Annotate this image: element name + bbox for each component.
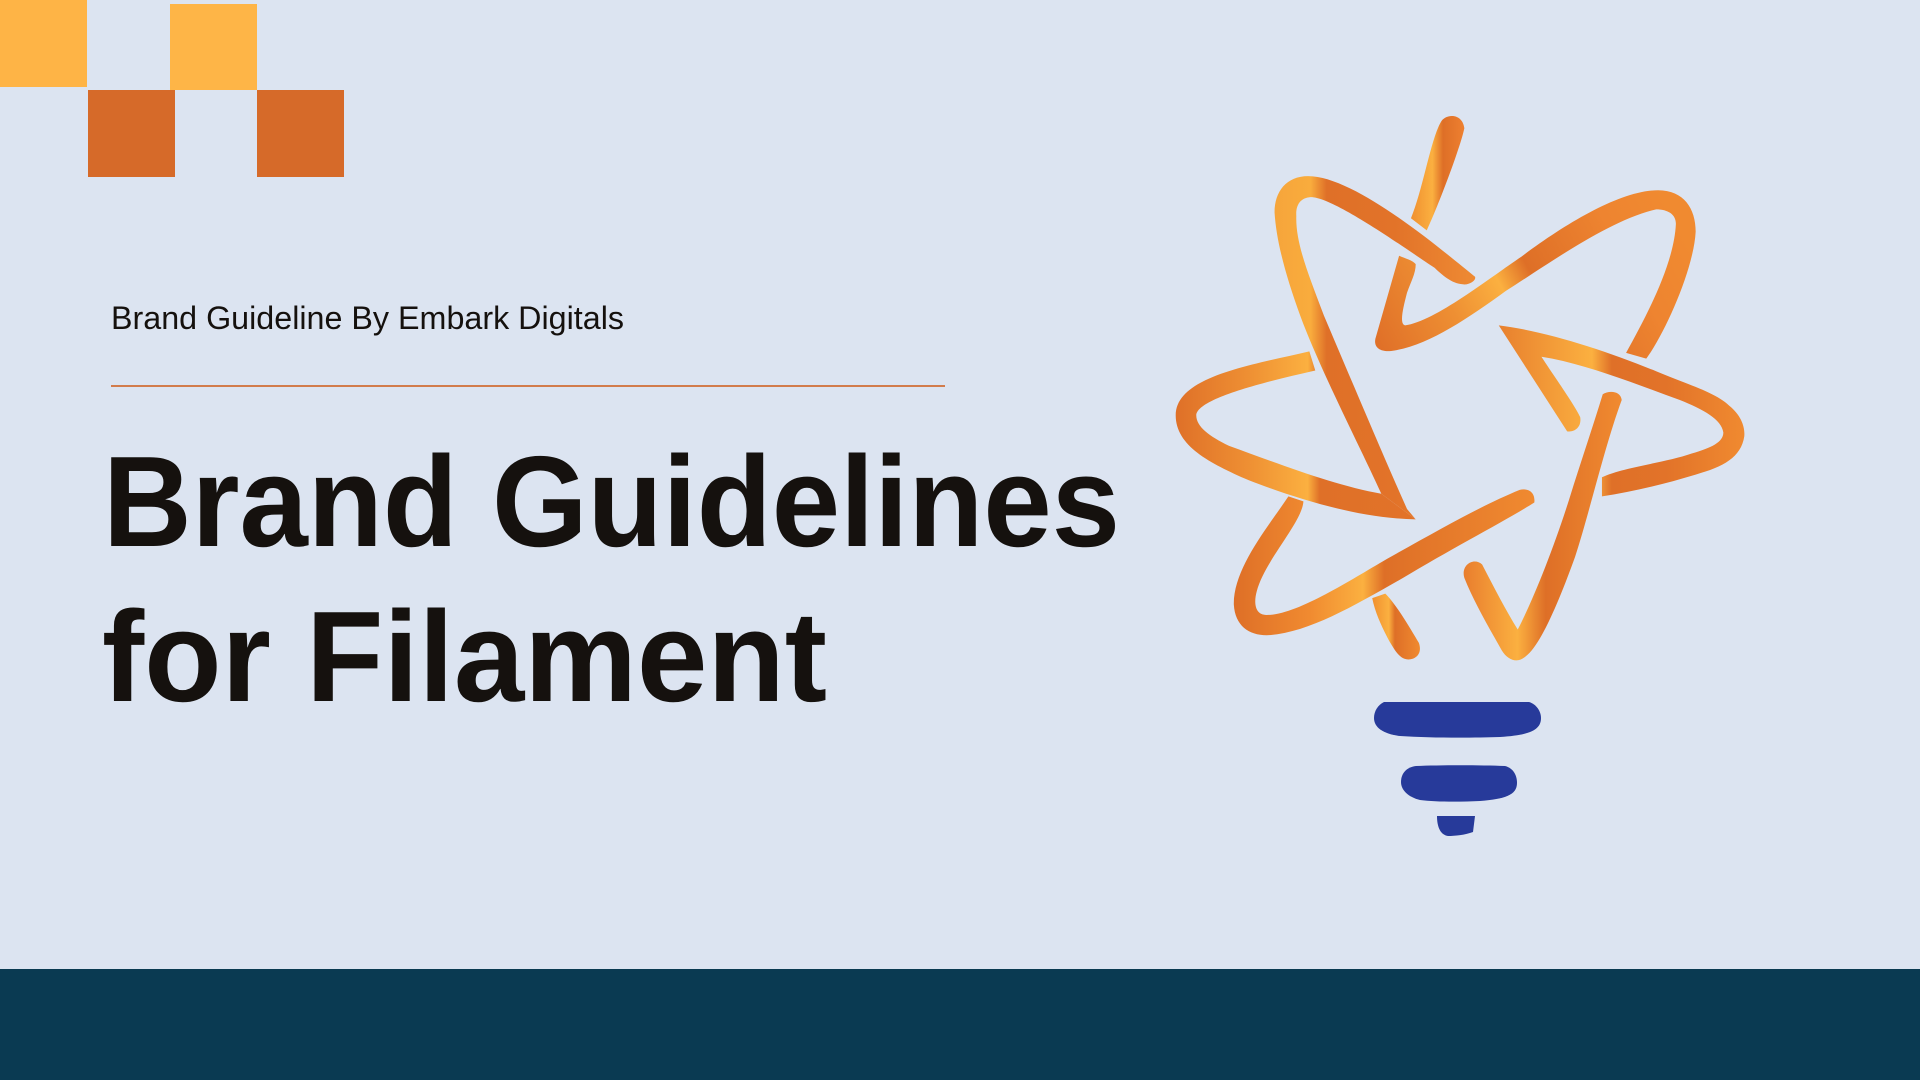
title: for Filament xyxy=(102,585,827,729)
subtitle: Brand Guideline By Embark Digitals xyxy=(111,300,624,336)
title: Brand Guidelines xyxy=(103,430,1120,574)
footer band xyxy=(0,969,1920,1080)
decorative checker squares xyxy=(0,0,344,177)
icon: filament light bulb xyxy=(1176,116,1744,836)
title xyxy=(102,430,1120,729)
bulb base xyxy=(1374,702,1541,836)
divider line xyxy=(111,385,945,387)
filament ribbons xyxy=(1176,116,1744,660)
